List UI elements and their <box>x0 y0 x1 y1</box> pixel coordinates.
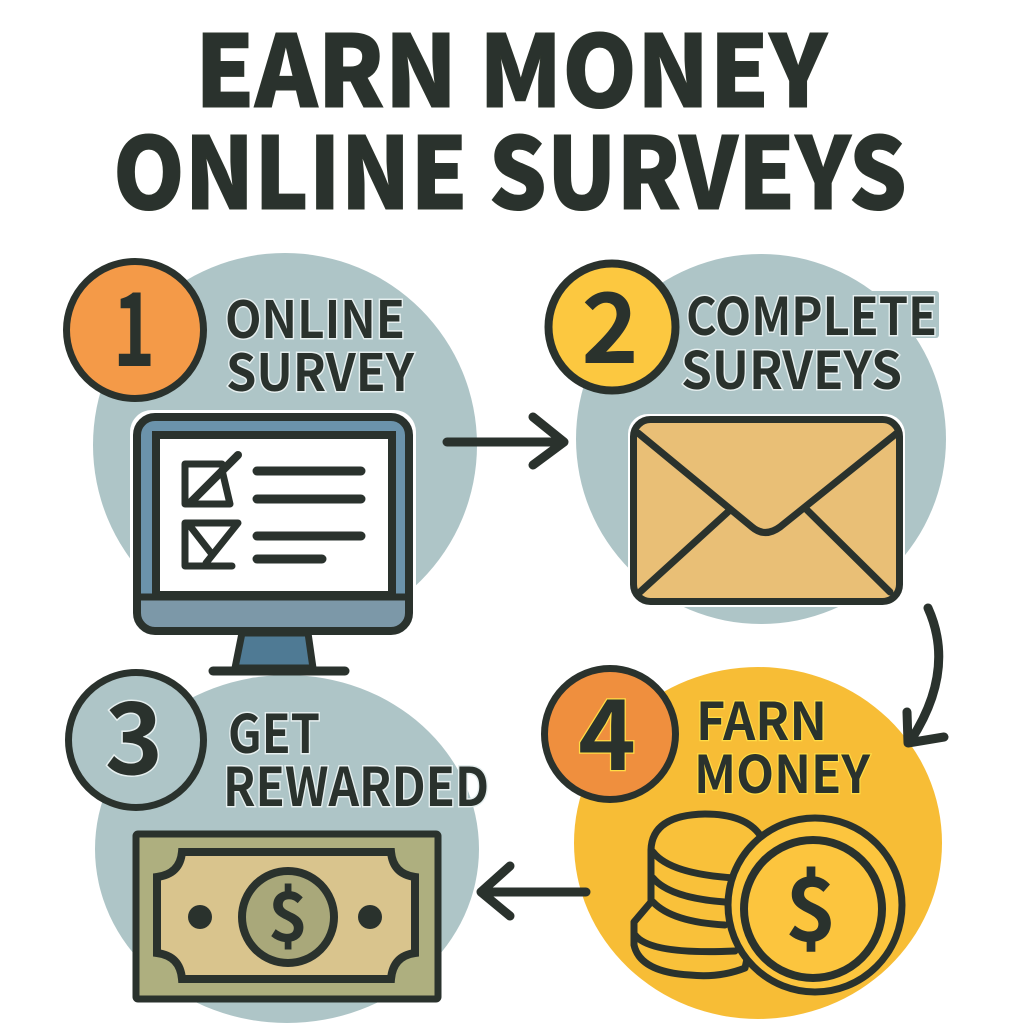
background circle 4 <box>574 667 942 1019</box>
panel: step 1 online survey <box>66 249 477 671</box>
icon: banknote <box>136 834 438 999</box>
label 3: GET <box>228 693 320 769</box>
label 2 <box>681 275 937 404</box>
badge 2: 2 <box>581 250 639 391</box>
label 3: REWARDED <box>223 746 489 822</box>
label 1: SURVEY <box>226 332 414 406</box>
icon: computer monitor with checklist <box>130 410 416 671</box>
background circle 1 <box>93 253 477 637</box>
arrow: step 2 to step 4 <box>907 608 944 743</box>
background circle 2 <box>576 254 946 624</box>
icon: envelope <box>628 414 905 607</box>
title: ONLINE SURVEYS <box>113 94 907 238</box>
icon: coins <box>634 814 902 992</box>
badge 4: 4 <box>578 657 636 799</box>
label 1 <box>225 279 414 406</box>
label 4: MONEY <box>694 733 871 808</box>
label 2: SURVEYS <box>681 329 902 404</box>
background circle 3 <box>95 675 479 1023</box>
arrow: step 4 to step 3 <box>481 866 586 916</box>
panel: step 2 complete surveys <box>548 250 946 624</box>
badge 1: 1 <box>113 249 155 396</box>
badge 3 <box>68 659 204 808</box>
label 1: ONLINE <box>225 279 405 353</box>
panel: step 3 get rewarded <box>68 659 489 1023</box>
badge 4 <box>544 657 676 800</box>
icon: banknote: $ <box>268 862 308 961</box>
label 3 <box>223 693 489 822</box>
icon: coins: $ <box>785 840 837 967</box>
label 2: COMPLETE <box>686 275 937 350</box>
badge 3: 3 <box>105 659 163 803</box>
label 4 <box>694 680 871 808</box>
label 4: FARN <box>696 680 827 755</box>
title <box>113 0 907 238</box>
badge 1 <box>66 249 204 398</box>
panel: step 4 earn money <box>544 657 942 1019</box>
badge 2 <box>548 250 676 391</box>
arrow: step 1 to step 2 <box>447 417 564 465</box>
